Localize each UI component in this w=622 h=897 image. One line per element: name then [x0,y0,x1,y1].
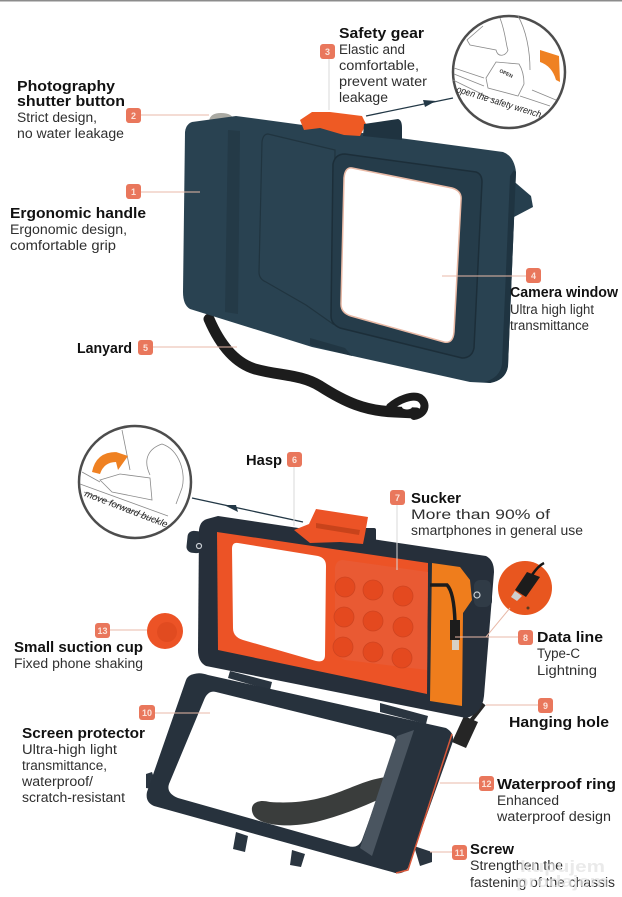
lid frame [147,673,453,873]
translucent strip [360,730,414,856]
hasp dark block [362,528,376,542]
callout 6: hasp: Hasp [246,453,282,469]
clasp dark block [363,119,402,140]
callout 12: waterproof ring [440,776,616,824]
badge 13: 13 [97,626,108,636]
badge 1 [126,184,141,199]
orange liner [217,532,428,694]
badge 5: 5 [143,343,148,353]
orange end panel [430,563,472,706]
badge 4 [526,268,541,283]
watermark: prodajem [516,872,608,891]
badge 12 [479,776,494,791]
callout 7: sucker: More than 90% of [411,507,550,522]
callout 1: ergonomic handle: comfortable grip [10,238,116,253]
callout 3: safety gear: leakage [339,90,388,105]
back panel outline [259,134,335,324]
hand sketch [100,430,183,504]
right edge shade [484,170,516,383]
mount foot [310,338,352,356]
top edge strip [0,0,622,2]
magnified connector [498,561,552,615]
callout 4: camera window: Camera window [510,285,619,301]
callout 10: screen protector: scratch-resistant [22,790,125,805]
hasp slot [316,523,360,535]
bottom tabs [233,832,305,867]
product: upper case, back view [183,112,533,416]
hasp [294,509,368,544]
callout 4: camera window: Ultra high light [510,302,594,317]
callout 7: sucker: smartphones in general use [411,523,583,538]
callout 7: sucker [390,490,583,570]
inset: open the safety wrench [453,16,565,128]
right ear [470,578,492,608]
screw ears [146,772,432,866]
badge 12: 12 [481,779,492,789]
callout 11: screw: Strengthen the [470,858,563,873]
rail lines [80,472,168,522]
callout 3: safety gear: comfortable, [339,58,419,73]
callout 4: camera window [442,268,619,333]
callout 2: shutter button: shutter button [17,94,125,110]
callout 10: screen protector [21,705,210,805]
inset caption: open the safety wrench [455,84,542,121]
callout 1: ergonomic handle [10,184,200,253]
badge 7 [390,490,405,505]
camera glass [341,168,461,342]
handle ridge [225,130,240,314]
badge 5 [138,340,153,355]
suction cup icon [147,613,183,649]
callout 3: safety gear: Elastic and [339,42,405,57]
callout 13: small suction cup: Small suction cup [14,640,143,656]
badge 1: 1 [131,187,136,197]
callout 10: screen protector: Ultra-high light [22,742,117,757]
cable [430,585,455,622]
badge 11 [452,845,467,860]
callout 9: hanging hole [486,698,609,731]
callout 13: small suction cup [14,613,183,671]
callout 11: screw: fastening of the chassis [470,875,615,890]
callout 10: screen protector: waterproof/ [21,774,93,789]
callout 3: safety gear: prevent water [339,74,428,89]
callout 5: lanyard [77,340,237,357]
product: screen protector lid [146,671,453,873]
callout 6: hasp [246,452,302,526]
badge 4: 4 [531,271,536,281]
callout 11: screw [430,842,615,890]
callout 3: safety gear: Safety gear [339,26,424,42]
badge 6: 6 [292,455,297,465]
badge 3: 3 [325,47,330,57]
callout 2: shutter button: no water leakage [17,126,124,141]
phone window [232,543,326,661]
callout 8: data line: Data line [537,630,603,646]
product: lower case, open interior [186,509,494,748]
inset circle [453,16,565,128]
callout 10: screen protector: Screen protector [22,726,145,742]
callout 11: screw: Screw [470,842,515,858]
badge 2: 2 [131,111,136,121]
case body [183,116,516,383]
strap seen through pane [252,777,386,825]
sucker panel [335,560,428,670]
shutter button [209,113,234,121]
window frame [331,154,482,358]
callout 9: hanging hole: Hanging hole [509,715,609,731]
badge 10 [139,705,155,720]
clasp label: OPEN [498,68,514,80]
arrow: inset to hasp [192,498,303,522]
left ear [186,530,204,554]
orange direction arrow [540,50,560,82]
right ear highlight [474,580,491,607]
rail lines [453,68,556,106]
inset circle [79,426,191,538]
callout 8: data line [455,561,603,678]
side block [498,178,533,222]
badge 2 [126,108,141,123]
callout 1: ergonomic handle: Ergonomic handle [10,206,146,222]
inset caption: move forward buckle [83,489,169,530]
arrow: inset to clasp [366,98,453,116]
callout 1: ergonomic handle: Ergonomic design, [10,222,127,237]
callout 12: waterproof ring: Waterproof ring [497,777,616,793]
strap loop hole [402,404,412,410]
callout 8: data line: Type-C [537,646,580,661]
case shell [198,516,494,718]
lid clear pane [168,692,396,847]
orange direction arrow [92,448,128,474]
callout 12: waterproof ring: Enhanced [497,793,559,808]
badge 13 [95,623,110,638]
callout 2: shutter button: Photography [17,79,115,95]
callout 7: sucker: Sucker [411,491,461,507]
orange clasp [300,112,366,136]
callout 2: shutter button: Strict design, [17,110,97,125]
waterproof ring [396,734,452,873]
hinge tabs [228,671,428,724]
hand sketch [467,16,530,96]
badge 9: 9 [543,701,548,711]
callout 13: small suction cup: Fixed phone shaking [14,656,143,671]
strap tab [452,716,478,748]
hanging strap [470,704,484,722]
badge 8: 8 [523,633,528,643]
callout 12: waterproof ring: waterproof design [496,809,611,824]
lanyard strap [209,319,425,416]
badge 11: 11 [455,848,464,858]
safety gear clasp [300,112,402,140]
callout 5: lanyard: Lanyard [77,341,132,357]
watermark [516,857,608,891]
badge 10: 10 [142,708,152,718]
callout 8: data line: Lightning [537,663,597,678]
callout 2: shutter button [17,79,209,141]
suction cups [333,577,413,668]
badge 7: 7 [395,493,400,503]
watermark: kupujem [520,857,605,876]
callout 4: camera window: transmittance [510,318,589,333]
callout 10: screen protector: transmittance, [22,758,107,773]
lightning connector [450,620,460,650]
inset: move forward buckle [79,426,191,538]
badge 8 [518,630,533,645]
callout 3: safety gear [320,26,428,110]
ear holes [196,544,480,598]
